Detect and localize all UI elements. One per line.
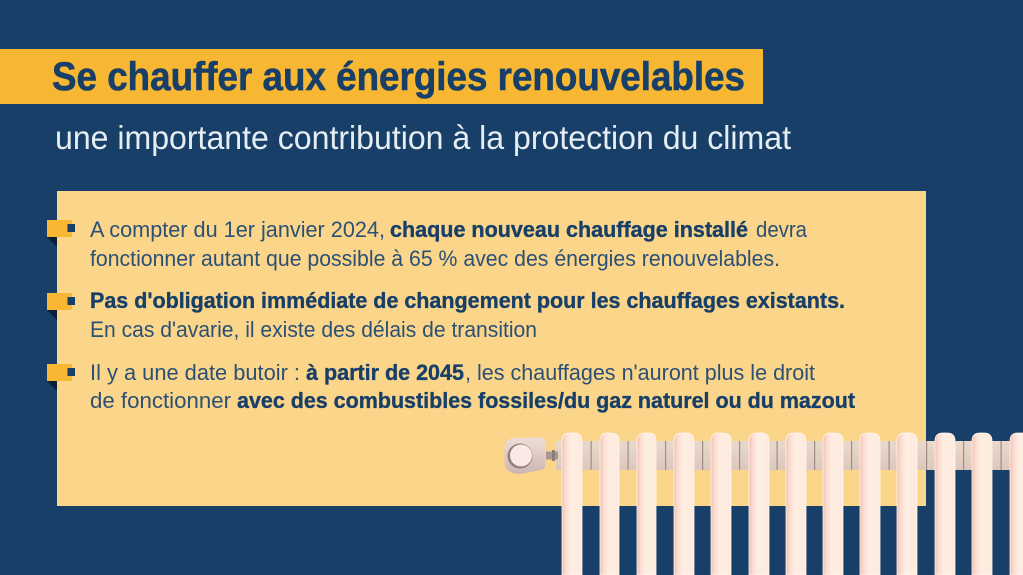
- bullet 2 marker: [47, 293, 75, 320]
- radiator valve: [504, 438, 558, 474]
- bullet 1 text: devra: [756, 217, 808, 242]
- bullet 3 text: avec des combustibles fossiles/du gaz naturel ou du mazout: [237, 388, 856, 413]
- bullet 1 text: A compter du 1er janvier 2024,: [90, 217, 385, 242]
- radiator rail: [556, 441, 1023, 470]
- subtitle: une importante contribution à la protection du climat: [55, 119, 791, 156]
- bullet 1 text: fonctionner autant que possible à 65 % avec des énergies renouvelables.: [90, 246, 780, 271]
- radiator columns: [562, 433, 1023, 575]
- bullet 2 text: [90, 288, 845, 342]
- bullet 2 text: En cas d'avarie, il existe des délais de transition: [90, 317, 537, 342]
- bullet 3 text: à partir de 2045: [306, 360, 464, 385]
- bullet 1 text: chaque nouveau chauffage installé: [390, 217, 748, 242]
- bullet 3 text: [90, 360, 856, 413]
- bullet 2 text: Pas d'obligation immédiate de changement pour les chauffages existants.: [90, 288, 845, 313]
- bullet 1 text: [90, 217, 808, 271]
- bullet 1 marker: [47, 220, 75, 247]
- bullet 3 text: de fonctionner: [90, 388, 231, 413]
- title banner: Se chauffer aux énergies renouvelables: [52, 55, 745, 99]
- bullet 3 text: Il y a une date butoir :: [90, 360, 300, 385]
- panel: key points: [47, 191, 926, 506]
- radiator illustration: [504, 433, 1023, 575]
- bullet 3 marker: [47, 364, 75, 391]
- bullet 3 text: , les chauffages n'auront plus le droit: [465, 360, 815, 385]
